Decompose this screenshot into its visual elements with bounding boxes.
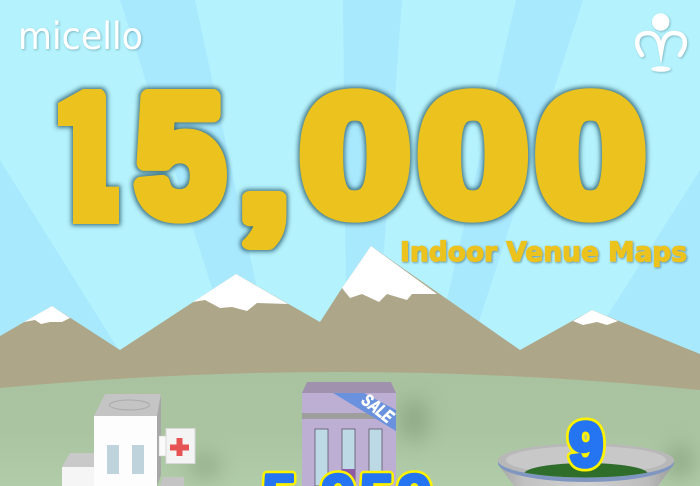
headline number bbox=[53, 83, 650, 255]
headline number: 0 bbox=[418, 61, 528, 251]
stat number: stadiums: 9 bbox=[569, 411, 603, 480]
logo icon bbox=[637, 13, 685, 72]
stat number: stadiums: 9 bbox=[569, 411, 603, 480]
headline caption: Indoor Venue Maps bbox=[400, 237, 687, 268]
headline number: 0 bbox=[300, 61, 410, 251]
ground bbox=[0, 372, 700, 486]
headline number: 5 bbox=[136, 60, 224, 250]
building shadows bbox=[189, 398, 694, 480]
hospital building bbox=[62, 394, 195, 486]
stadium bbox=[498, 444, 674, 486]
headline number: 0 bbox=[535, 61, 646, 251]
mountains bbox=[0, 246, 700, 420]
headline number: , bbox=[236, 82, 292, 253]
sale banner text: SALE bbox=[358, 391, 397, 428]
headline number: 1 bbox=[21, 61, 131, 251]
brand wordmark: micello bbox=[18, 15, 143, 58]
icon: red cross bbox=[170, 438, 189, 456]
shopping mall building bbox=[302, 382, 397, 486]
